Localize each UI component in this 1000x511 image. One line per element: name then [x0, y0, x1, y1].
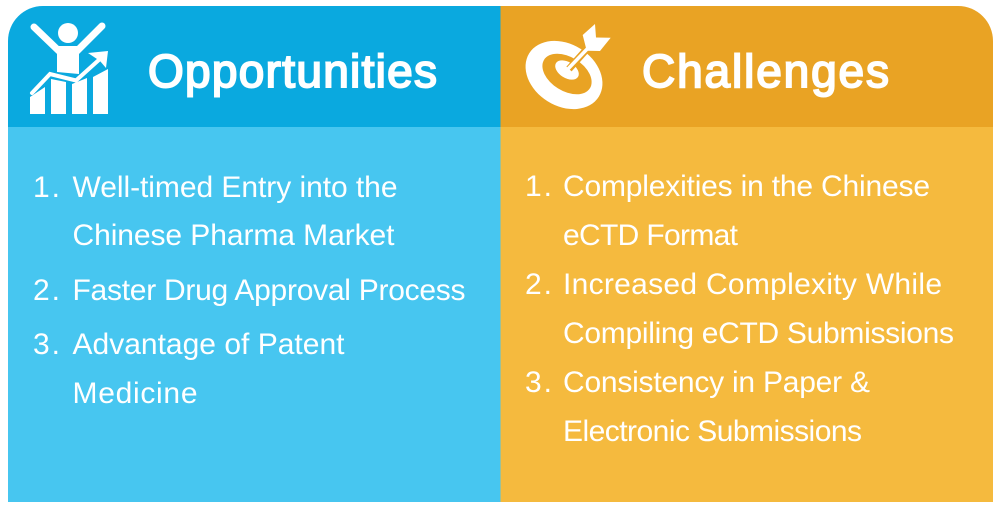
list: challenges: Compiling eCTD Submissions [563, 317, 954, 350]
list: opportunities: 1. [33, 171, 60, 204]
icon: target with arrow [513, 24, 615, 123]
list: challenges: 1. [525, 170, 552, 203]
list: challenges: Consistency in Paper & [563, 366, 870, 399]
icon: person celebrating above rising chart [30, 23, 108, 114]
panel: opportunities [8, 6, 500, 502]
heading: challenges: Challenges [642, 45, 889, 97]
list: opportunities: 3. [33, 328, 60, 361]
opportunities body background [8, 127, 500, 502]
list: opportunities: Advantage of Patent [72, 328, 345, 361]
list: challenges: Complexities in the Chinese [563, 170, 930, 203]
list: opportunities: Chinese Pharma Market [72, 219, 395, 252]
list: opportunities: Medicine [72, 377, 198, 410]
list: opportunities: Faster Drug Approval Process [72, 274, 466, 307]
challenges body background [500, 127, 993, 502]
list: challenges: 2. [525, 268, 552, 301]
list: opportunities: 2. [33, 274, 60, 307]
list: opportunities [33, 171, 466, 410]
list: challenges: eCTD Format [563, 219, 739, 252]
opportunities header background [8, 6, 500, 127]
challenges header background [500, 6, 993, 127]
list: challenges: 3. [525, 366, 552, 399]
heading: opportunities: Opportunities [148, 45, 437, 97]
list: opportunities: Well-timed Entry into the [72, 171, 398, 204]
list: challenges: Increased Complexity While [563, 268, 942, 301]
list: challenges: Electronic Submissions [563, 415, 862, 448]
panel: challenges [500, 6, 993, 502]
list: challenges [525, 170, 954, 448]
